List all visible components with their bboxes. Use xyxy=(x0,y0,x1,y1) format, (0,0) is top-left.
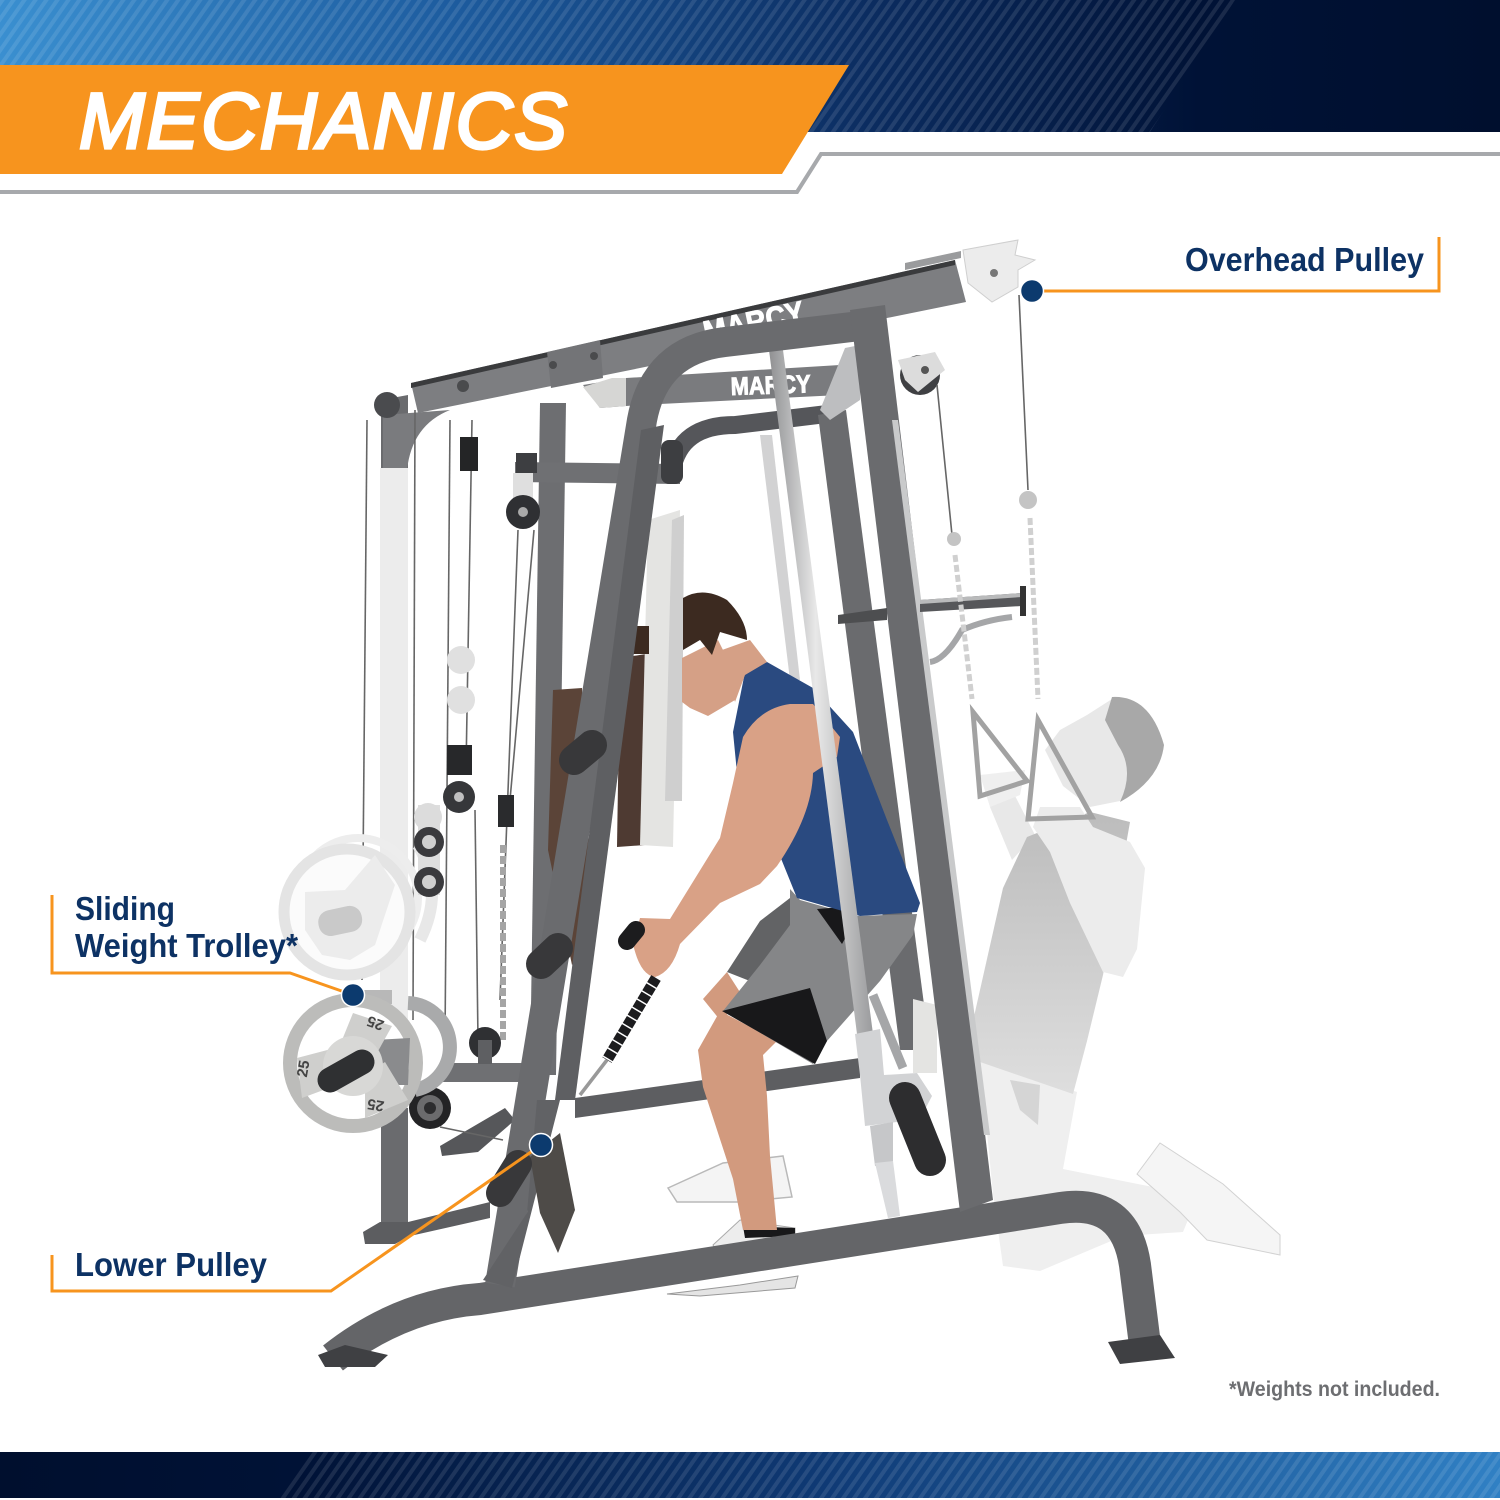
faded person: lat pulldown xyxy=(973,697,1280,1271)
carriage pulley xyxy=(506,453,540,529)
rear left column xyxy=(381,395,408,1232)
faded tee xyxy=(973,812,1130,1094)
lower leg reinforcement xyxy=(483,1100,560,1288)
chain xyxy=(500,845,506,1040)
bottom pulley xyxy=(469,1027,501,1064)
arm xyxy=(633,704,840,977)
rear base foot xyxy=(440,1108,515,1156)
ghost weight trolley xyxy=(284,803,444,975)
neck xyxy=(722,640,767,702)
beam top edge xyxy=(411,260,955,388)
feet xyxy=(318,1345,388,1367)
callout: lower pulley xyxy=(52,1134,552,1291)
title: MECHANICS xyxy=(79,76,567,165)
shorts xyxy=(723,889,917,1064)
black panel xyxy=(722,988,827,1064)
post silver strip xyxy=(892,420,990,1135)
base rail xyxy=(333,1207,1145,1358)
inner strut xyxy=(555,425,664,1100)
rear knee xyxy=(703,972,745,1020)
footer banner xyxy=(0,1452,1500,1498)
sock xyxy=(743,1226,795,1238)
faded hair xyxy=(1105,697,1164,802)
faded front arm xyxy=(1033,807,1145,977)
arch frame xyxy=(500,326,860,1285)
footnote: *Weights not included. xyxy=(1229,1378,1440,1401)
floor pulley xyxy=(409,1087,451,1129)
hair xyxy=(683,592,747,655)
rear crossbar xyxy=(515,462,680,484)
chrome guide rear xyxy=(760,435,800,680)
peg lower xyxy=(500,1164,518,1193)
hair behind pad xyxy=(633,626,649,654)
faded head xyxy=(1045,699,1147,807)
long base crossbar xyxy=(575,1058,860,1118)
rear right bracket xyxy=(820,345,860,420)
hanging chains faded xyxy=(955,518,1038,699)
face xyxy=(682,640,738,716)
bench pads xyxy=(548,510,684,965)
block and pulley xyxy=(443,745,475,813)
inner column xyxy=(530,403,566,1075)
overhead pulley housing xyxy=(963,240,1035,302)
faded rear forearm xyxy=(990,786,1035,860)
shin xyxy=(698,1011,777,1230)
block on cable xyxy=(460,437,478,471)
callout: overhead pulley: Overhead Pulley xyxy=(1185,241,1425,278)
callout: sliding weight trolley: Sliding xyxy=(75,890,175,927)
white guide rail xyxy=(380,468,408,1108)
rear beam xyxy=(583,365,840,408)
upper shoe xyxy=(713,1220,795,1258)
faded legs and shorts xyxy=(980,1060,1190,1271)
small block xyxy=(498,795,514,827)
machine: front structure xyxy=(318,305,1175,1367)
MARCY logo top: MARCY xyxy=(700,294,808,350)
header rule xyxy=(0,154,1500,192)
title ribbon xyxy=(0,65,849,174)
machine: rear structure xyxy=(284,240,1035,1244)
chain balls xyxy=(947,491,1037,546)
ghost pulleys xyxy=(447,646,475,714)
rope xyxy=(607,978,656,1060)
pull-up bar xyxy=(838,586,1026,662)
weight plates: 25 xyxy=(294,1059,314,1078)
weight plates: 25 xyxy=(366,1095,385,1114)
rear arch xyxy=(672,413,835,470)
weight plates xyxy=(290,990,450,1126)
peg middle xyxy=(541,948,558,964)
front shoe xyxy=(667,1276,798,1296)
MARCY logo rear: MARCY xyxy=(730,370,811,401)
top rod xyxy=(905,251,961,270)
beam joint xyxy=(547,340,603,388)
rear bracket light xyxy=(583,378,626,408)
footplate xyxy=(530,1133,575,1253)
lower cross stub xyxy=(442,1063,530,1082)
curved brace xyxy=(383,410,450,470)
rope clip xyxy=(580,1060,607,1095)
callout: sliding weight trolley: Weight Trolley* xyxy=(75,927,298,964)
beam bolts xyxy=(457,352,598,392)
person: cable row xyxy=(580,592,920,1296)
triangle handles xyxy=(973,712,1092,819)
dark short liner xyxy=(727,898,810,985)
rear foot and base xyxy=(363,1202,490,1244)
cables xyxy=(362,295,1028,1140)
callout: lower pulley: Lower Pulley xyxy=(75,1246,268,1283)
smith carriage xyxy=(855,995,937,1218)
faded shoes xyxy=(1137,1143,1280,1255)
rear upright xyxy=(818,410,930,1050)
header banner xyxy=(0,0,1500,132)
rear pulley xyxy=(898,352,945,395)
weight plates: 25 xyxy=(365,1012,386,1034)
front right post xyxy=(850,305,993,1212)
top-left pulley xyxy=(374,392,400,418)
rope handle xyxy=(627,930,636,941)
callout: sliding weight trolley xyxy=(52,890,364,1006)
top beam xyxy=(411,260,966,413)
black waist xyxy=(817,907,847,944)
chrome smith bar xyxy=(769,350,873,1034)
dark bracket xyxy=(661,440,683,484)
peg upper xyxy=(574,745,592,760)
tank top xyxy=(733,662,920,916)
faded hand xyxy=(980,770,1025,807)
callout: overhead pulley xyxy=(1020,237,1439,302)
rear shoe xyxy=(668,1156,792,1202)
faded shorts shadow xyxy=(1010,1080,1040,1125)
